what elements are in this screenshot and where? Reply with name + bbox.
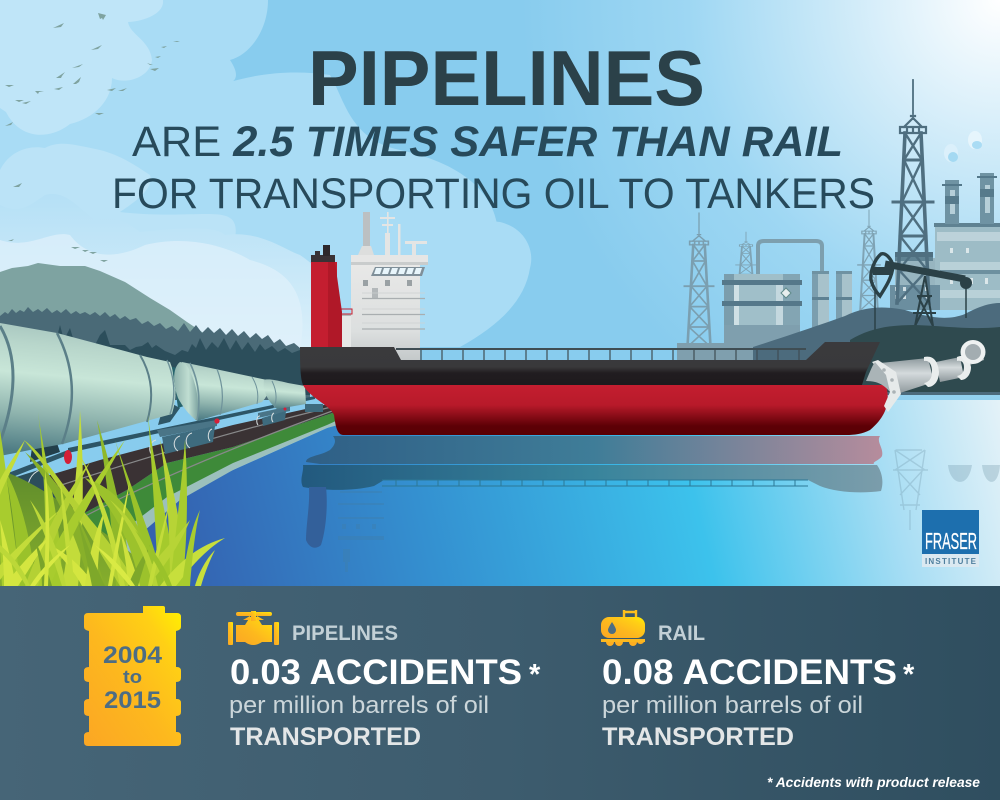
- bottom panel: [0, 586, 1000, 800]
- hills: right: [753, 254, 1000, 395]
- train tracks and bank: [0, 403, 340, 590]
- pipelines value: 0.03 ACCIDENTS: [230, 653, 522, 692]
- factory building: [890, 223, 1000, 310]
- icon: valve: [228, 611, 279, 645]
- pipe segment 3: [963, 343, 984, 365]
- barrel badge: to: [123, 667, 142, 687]
- cylinders: [812, 271, 852, 349]
- pumpjack: [871, 254, 972, 335]
- ship reflection: [301, 436, 882, 572]
- logo word: Institute: INSTITUTE: [925, 557, 977, 566]
- title line 2: ARE 2.5 TIMES SAFER THAN RAIL: [132, 118, 843, 166]
- chimneys: [942, 173, 997, 224]
- brake lights: [64, 408, 286, 464]
- tower: main derrick: [893, 80, 933, 303]
- tank car: second: [174, 362, 269, 421]
- asterisk: *: [529, 659, 541, 691]
- footnote: * Accidents with product release: [767, 774, 980, 790]
- funnel: [311, 245, 342, 348]
- reflection: refinery: [893, 450, 1000, 530]
- storage tank: [677, 241, 822, 363]
- title line 1: PIPELINES: [308, 34, 705, 122]
- tower: small derrick: [736, 232, 756, 292]
- logo: Fraser Institute: [922, 510, 979, 567]
- deck railing: [396, 349, 806, 360]
- hull: black: [300, 342, 880, 385]
- grass: [0, 410, 225, 586]
- tank car: third: [264, 379, 306, 409]
- background: sky: [0, 0, 1000, 590]
- clouds: [0, 0, 531, 350]
- tank car: first: [0, 323, 176, 456]
- water: [120, 400, 1000, 586]
- rail label: RAIL: [658, 622, 705, 645]
- rail transported: TRANSPORTED: [602, 723, 794, 751]
- rail value: 0.08 ACCIDENTS: [602, 653, 897, 692]
- refinery skyline: [677, 80, 1000, 363]
- tank gap: [172, 367, 190, 408]
- pipelines label: PIPELINES: [292, 622, 398, 645]
- ship: [300, 212, 888, 435]
- pipeline: [866, 340, 986, 412]
- pipe segment 1: [880, 358, 934, 394]
- hull: red: [303, 385, 888, 435]
- icon: rail tanker: [601, 610, 645, 646]
- hills and forest: left: [0, 263, 310, 400]
- pipelines unit: per million barrels of oil: [229, 692, 489, 719]
- pipe segment 2: [936, 357, 964, 382]
- ship superstructure: [335, 212, 428, 360]
- rail unit: per million barrels of oil: [602, 692, 863, 719]
- tower: right derrick: [858, 210, 880, 310]
- barrel text: 2004: [103, 642, 163, 669]
- smoke puffs: [944, 131, 982, 162]
- tower: left derrick: [685, 213, 713, 347]
- barrel badge: 2015: [104, 687, 161, 714]
- asterisk: *: [903, 659, 915, 691]
- oil tank train: [0, 323, 323, 512]
- stat: pipelines: [228, 611, 541, 751]
- bogies and frames: [0, 395, 315, 512]
- birds: [5, 13, 180, 262]
- title line 3: FOR TRANSPORTING OIL TO TANKERS: [112, 170, 875, 218]
- barrel badge: [84, 606, 181, 746]
- title: [112, 34, 875, 218]
- stat: rail: [601, 610, 915, 751]
- pipelines transported: TRANSPORTED: [230, 723, 421, 751]
